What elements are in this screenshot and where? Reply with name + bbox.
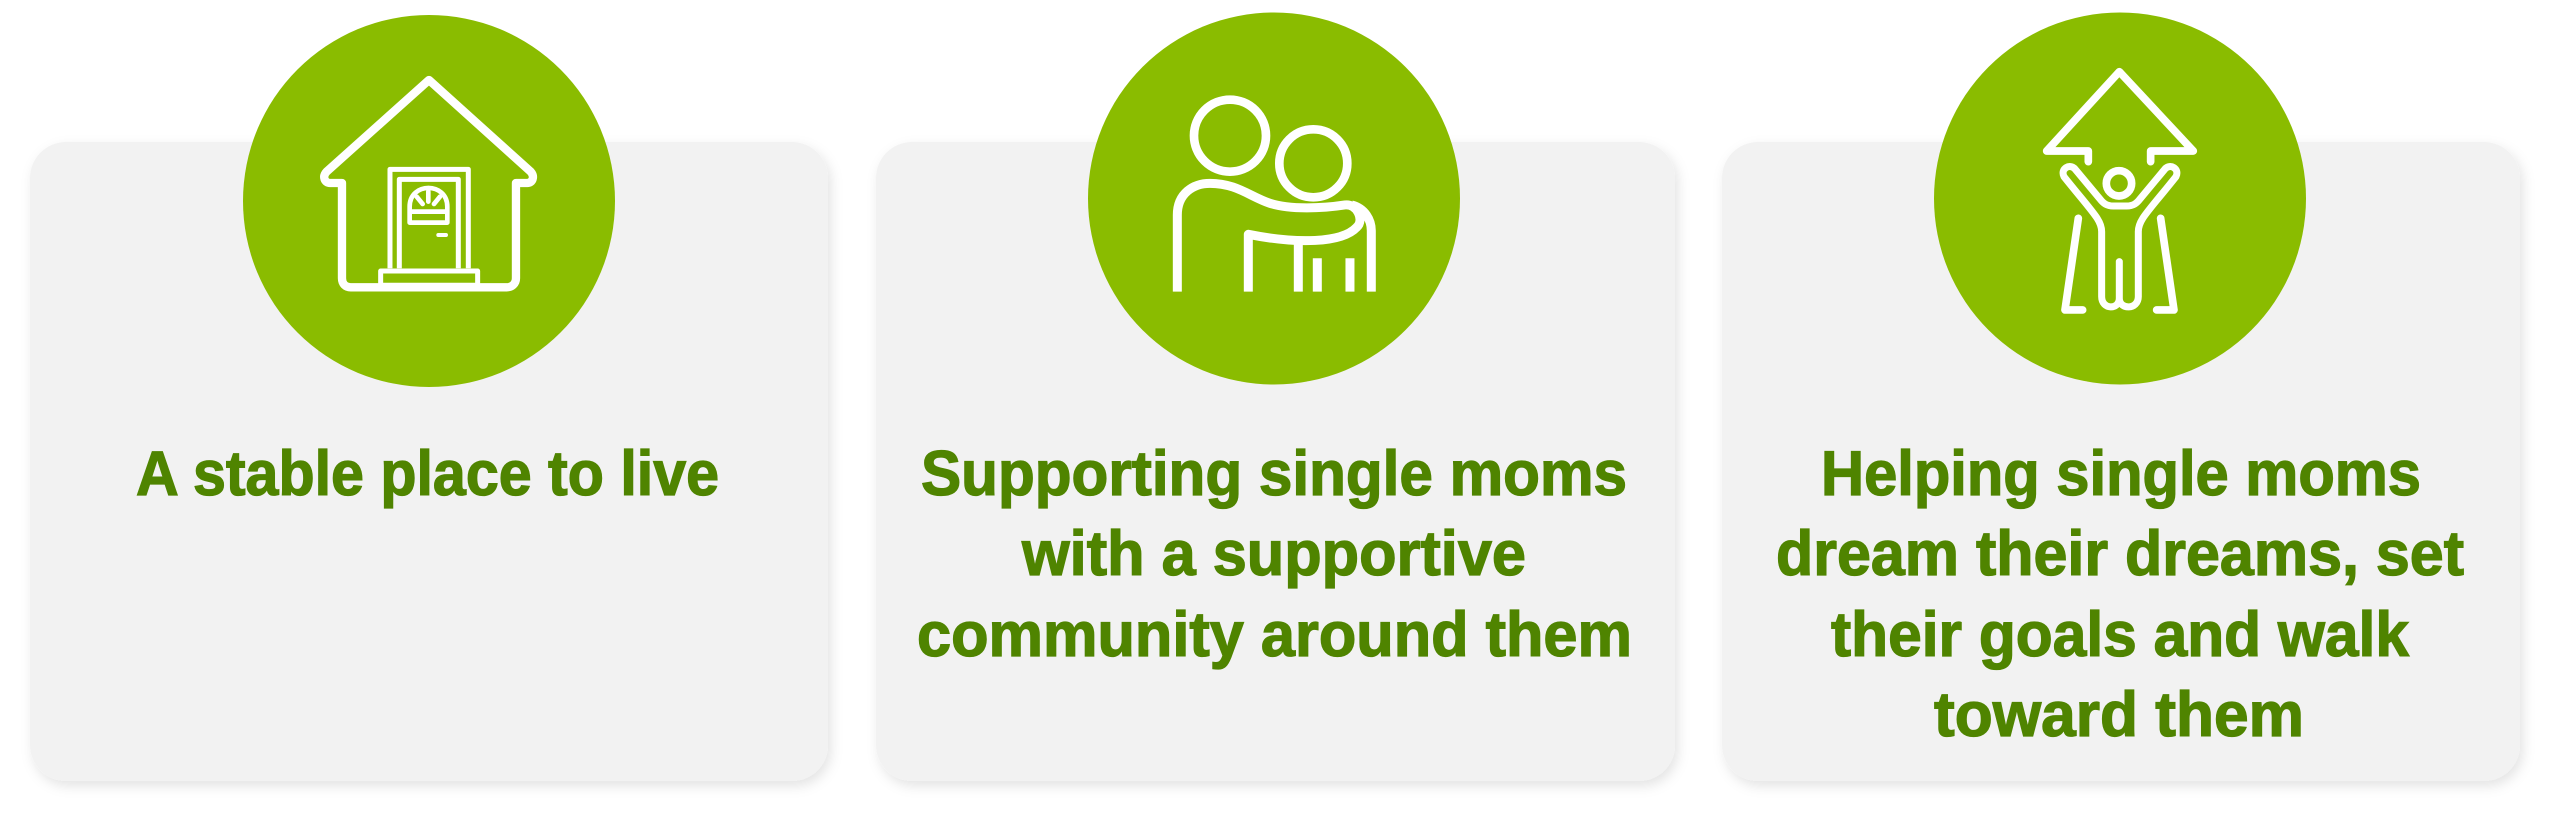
heading	[917, 439, 1632, 670]
card background	[876, 142, 1675, 781]
heading: their goals and walk	[1831, 600, 2410, 670]
green circle	[1934, 12, 2306, 384]
green circle	[1088, 12, 1460, 384]
heading: toward them	[1934, 680, 2304, 750]
panel: dreams and goals	[1722, 12, 2520, 781]
card background	[30, 142, 828, 781]
green circle	[243, 15, 615, 387]
heading: Helping single moms	[1821, 439, 2421, 509]
heading: Supporting single moms	[921, 439, 1627, 509]
panel: a stable place to live	[30, 15, 828, 781]
card background	[1722, 142, 2520, 781]
icon: two people, arm around shoulder	[1177, 100, 1371, 292]
heading: A stable place to live	[136, 439, 719, 509]
icon: person with raised arms and up arrow	[2047, 72, 2193, 310]
heading: community around them	[917, 600, 1632, 670]
heading	[1776, 439, 2464, 750]
heading: with a supportive	[1021, 519, 1526, 589]
icon: house with door	[324, 80, 533, 287]
panel: supportive community	[876, 12, 1675, 781]
heading: dream their dreams, set	[1776, 519, 2464, 589]
